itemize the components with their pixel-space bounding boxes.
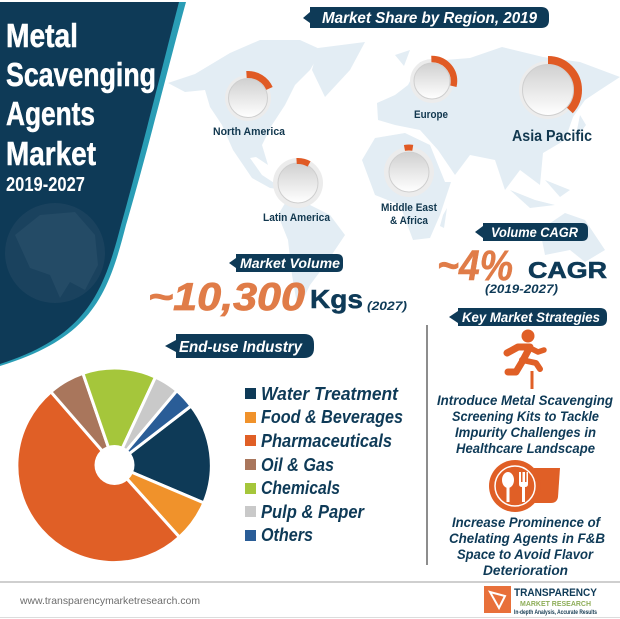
text block: strategy one (437, 392, 613, 456)
donut: Europe (410, 59, 454, 121)
badge: volume CAGR (475, 223, 588, 241)
text block: strategy two: Space to Avoid Flavor (457, 546, 594, 562)
footer url: www.transparencymarketresearch.com (19, 595, 200, 607)
heading: title text: Agents (6, 95, 95, 132)
stat: market volume (148, 276, 407, 319)
legend (245, 384, 403, 545)
logo: In-depth Analysis, Accurate Results (514, 610, 598, 616)
badge: volume CAGR: Volume CAGR (491, 225, 578, 240)
heading: title text: Scavenging (6, 56, 156, 93)
donut: Europe: Europe (414, 109, 448, 121)
badge: market volume (229, 254, 343, 272)
heading: title text: 2019-2027 (6, 174, 85, 196)
text block: strategy two: Chelating Agents in F&B (449, 530, 605, 546)
text block: strategy two: Increase Prominence of (452, 514, 601, 530)
stat: market volume: Kgs (310, 284, 363, 314)
donut: Middle East and Africa (381, 144, 437, 227)
stat: CAGR: CAGR (528, 257, 607, 283)
badge: end-use industry: End-use Industry (179, 339, 303, 356)
stat: CAGR (437, 242, 607, 296)
logo: TRANSPARENCY (514, 587, 598, 599)
text block: strategy one: Introduce Metal Scavenging (437, 392, 613, 408)
text block: strategy one: Impurity Challenges in (455, 424, 596, 440)
heading: title text (6, 17, 156, 196)
donut: Middle East and Africa: Middle East (381, 202, 437, 214)
heading: title text: Market (6, 135, 96, 172)
legend: Pulp & Paper (261, 502, 365, 522)
donut: Latin America (263, 158, 331, 224)
text block: strategy two (449, 514, 605, 578)
legend: Pharmaceuticals (261, 431, 392, 451)
panel: title (0, 2, 186, 366)
donut: Asia Pacific: Asia Pacific (512, 128, 592, 145)
legend: Oil & Gas (261, 455, 334, 475)
donut: Latin America: Latin America (263, 212, 331, 224)
logo: MARKET RESEARCH (520, 599, 591, 608)
stat: CAGR: (2019-2027) (485, 282, 558, 296)
icon: plate, cutlery and cup (489, 460, 560, 512)
legend: Chemicals (261, 478, 340, 498)
world map (168, 40, 620, 310)
logo (484, 586, 598, 616)
donut: Asia Pacific (512, 60, 592, 145)
icon: globe (5, 203, 105, 303)
stat: market volume: ~10,300 (148, 276, 305, 319)
legend: Food & Beverages (261, 407, 403, 427)
heading: title text: Metal (6, 17, 78, 54)
legend: Others (261, 525, 313, 545)
icon: runner jumping hurdle (507, 330, 544, 389)
badge: end-use industry (165, 334, 314, 358)
badge: market share by region: Market Share by Region, 2019 (322, 10, 537, 27)
donut: Middle East and Africa: & Africa (390, 215, 429, 227)
legend: Water Treatment (261, 384, 399, 404)
donut: North America: North America (213, 126, 286, 138)
badge: market volume: Market Volume (240, 256, 341, 271)
donut: North America (213, 74, 286, 138)
text block: strategy one: Screening Kits to Tackle (452, 408, 599, 424)
stat: market volume: (2027) (367, 299, 407, 313)
text block: strategy two: Deterioration (483, 562, 568, 578)
pie chart: end-use industry (17, 368, 211, 563)
stat: CAGR: ~4% (437, 242, 513, 290)
text block: strategy one: Healthcare Landscape (456, 440, 595, 456)
badge: key market strategies: Key Market Strategies (462, 310, 600, 325)
